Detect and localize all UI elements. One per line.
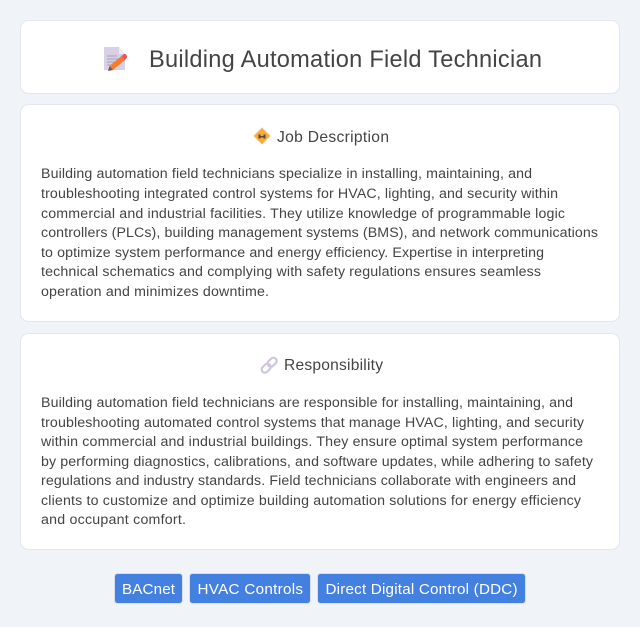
- panel: job description: [20, 104, 620, 322]
- icon: orange diamond: [254, 128, 270, 144]
- text block: job description: controllers (PLCs), building management systems (BMS), and network communications: [41, 225, 598, 241]
- text block: responsibility: within commercial and industrial buildings. They ensure optimal system performance: [40, 434, 583, 450]
- title: Building Automation Field Technician: [149, 47, 542, 73]
- panel: responsibility: [20, 334, 620, 550]
- tag: BACnet: BACnet: [122, 581, 176, 598]
- tag: BACnet: [114, 574, 182, 604]
- text block: job description: technical schematics and complying with safety regulations ensures seamless: [41, 264, 541, 280]
- heading: responsibility: Responsibility: [284, 357, 383, 374]
- icon: document with pencil: [104, 47, 127, 71]
- icon: chain link: [260, 356, 278, 374]
- text block: job description: [41, 166, 598, 300]
- text block: responsibility: troubleshooting automated control systems that manage HVAC, lighting, and security: [41, 415, 585, 431]
- text block: job description: commercial and industrial facilities. They utilize knowledge of programmable logic: [41, 206, 565, 222]
- panel: title card: [20, 20, 620, 94]
- text block: responsibility: and occupant comfort.: [41, 512, 186, 528]
- text block: job description: operation and minimizes downtime.: [41, 284, 269, 300]
- text block: job description: Building automation field technicians specialize in installing, maintaining, and: [41, 166, 532, 182]
- text block: responsibility: by performing diagnostics, calibrations, and software updates, while adhering to safety: [41, 454, 594, 470]
- text block: responsibility: clients to customize and optimize building automation solutions for energy efficiency: [41, 493, 582, 509]
- text block: responsibility: [40, 395, 594, 528]
- text block: job description: troubleshooting integrated control systems for HVAC, lighting, and security within: [41, 186, 558, 202]
- text block: responsibility: regulations and industry standards. Field technicians collaborate with engineers and: [41, 473, 576, 489]
- heading: job description: Job Description: [277, 129, 389, 146]
- text block: responsibility: Building automation field technicians are responsible for installing, maintaining, and: [41, 395, 573, 411]
- tag: Direct Digital Control (DDC): [318, 574, 526, 604]
- text block: job description: to optimize system performance and energy efficiency. Expertise in interpreting: [41, 245, 544, 261]
- tag: HVAC Controls: [190, 574, 310, 604]
- tag: Direct Digital Control (DDC): Direct Digital Control (DDC): [326, 581, 518, 598]
- tag: HVAC Controls: HVAC Controls: [198, 581, 303, 598]
